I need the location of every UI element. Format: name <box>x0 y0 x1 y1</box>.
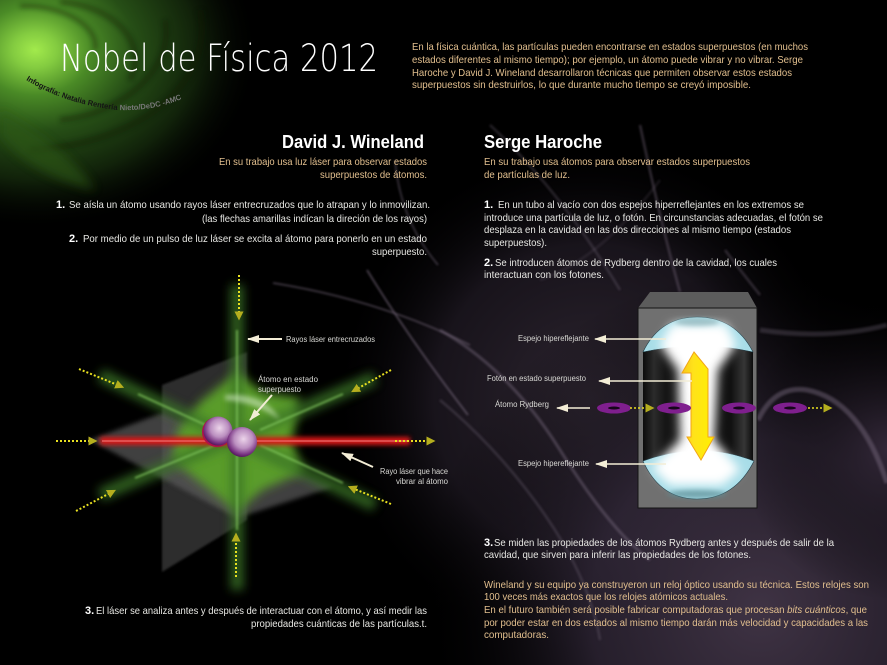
subheading: Wineland: En su trabajo usa luz láser para observar estados <box>219 156 427 168</box>
Haroche step 3: Se miden las propiedades de los átomos Rydberg antes y después de salir de la <box>494 537 834 549</box>
subheading: Haroche: de partículas de luz. <box>484 169 570 181</box>
white light column <box>652 324 740 485</box>
heading: Serge Haroche: Serge Haroche <box>484 132 602 152</box>
subheading: Haroche: En su trabajo usa átomos para observar estados superpuestos <box>484 156 750 168</box>
Wineland step 2: 2. <box>69 233 78 245</box>
Wineland step 1 <box>56 199 430 225</box>
label: atomo: Átomo en estado <box>258 375 319 384</box>
atoms <box>202 416 257 457</box>
Wineland step 3: El láser se analiza antes y después de interactuar con el átomo, y así medir las <box>96 605 427 617</box>
bottom mirror <box>643 450 754 499</box>
Haroche step 3: 3. <box>484 537 493 549</box>
intro text: Haroche y David J. Wineland desarrollaron técnicas que permiten observar estos estados <box>412 67 792 79</box>
label: atomo rydberg: Átomo Rydberg <box>495 400 549 409</box>
Rydberg atoms <box>597 402 807 414</box>
intro text: estados diferentes al mismo tiempo); por ejemplo, un átomo puede vibrar y no vibrar. Serge <box>412 54 803 66</box>
Wineland step 1: Se aísla un átomo usando rayos láser entrecruzados que lo atrapan y lo inmovilizan. <box>69 199 430 211</box>
title: Nobel de Física 2012 <box>60 37 378 80</box>
Wineland step 2: Por medio de un pulso de luz láser se excita al átomo para ponerlo en un estado <box>83 233 427 245</box>
subheading: Haroche <box>484 156 750 181</box>
Haroche step 3: cavidad, que sirven para inferir las propiedades de los fotones. <box>484 549 751 561</box>
Haroche step 2 <box>484 257 777 281</box>
label: rayo vibrar: Rayo láser que hace <box>380 467 448 476</box>
intro text: En la física cuántica, las partículas pueden encontrarse en estados superpuestos (en muchos <box>412 41 808 53</box>
Wineland step 3: 3. <box>85 605 94 617</box>
grey planes <box>90 352 333 572</box>
top mirror <box>643 317 753 352</box>
label: atomo <box>258 375 319 394</box>
label: atomo: superpuesto <box>258 385 302 394</box>
label: rayo vibrar: vibrar al átomo <box>396 477 449 486</box>
red laser beam <box>100 437 410 445</box>
atom diagram <box>56 275 449 590</box>
yellow dotted arrows <box>56 275 431 577</box>
label: espejo 2: Espejo hipereflejante <box>518 459 590 468</box>
Haroche step 1: En un tubo al vacío con dos espejos hiperreflejantes en los extremos se <box>498 199 804 211</box>
Wineland step 2: superpuesto. <box>372 246 427 258</box>
Haroche step 1 <box>484 199 823 249</box>
conclusion text: En el futuro también será posible fabricar computadoras que procesan bits cuánticos, que <box>484 604 867 616</box>
Haroche step 1: introduce una partícula de luz, o fotón. En circunstancias adecuadas, el fotón se <box>484 212 823 224</box>
mirror shading <box>667 318 727 498</box>
Haroche step 1: 1. <box>484 199 493 211</box>
Wineland step 3: propiedades cuánticas de las partículas.t. <box>251 618 427 630</box>
Haroche step 2: Se introducen átomos de Rydberg dentro de la cavidad, los cuales <box>495 257 777 269</box>
Haroche step 2: interactuan con los fotones. <box>484 269 604 281</box>
conclusion text: 100 veces más exactos que los relojes atómicos actuales. <box>484 591 728 603</box>
dotted arrows <box>630 407 828 409</box>
cavity diagram <box>487 292 828 508</box>
intro text <box>412 41 808 91</box>
photon double arrow <box>682 352 714 460</box>
subheading: Wineland: superpuestos de átomos. <box>320 169 427 181</box>
label: foton: Fotón en estado superpuesto <box>487 374 587 383</box>
credit: Infografía: Natalia Rentería Nieto/DeDC -AMC <box>26 76 182 110</box>
Haroche step 3 <box>484 537 834 561</box>
conclusion text: computadoras. <box>484 629 549 641</box>
conclusion text <box>484 579 869 641</box>
label: espejo 1: Espejo hipereflejante <box>518 334 590 343</box>
Wineland step 3 <box>85 605 427 630</box>
label: rayo vibrar <box>380 467 449 486</box>
pointer arrows <box>248 339 373 467</box>
green laser glow <box>100 285 375 590</box>
Wineland step 1: 1. <box>56 199 65 211</box>
label: rayos: Rayos láser entrecruzados <box>286 335 375 344</box>
Haroche step 2: 2. <box>484 257 493 269</box>
cylinder <box>643 346 753 461</box>
Wineland step 2 <box>69 233 427 258</box>
Wineland step 1: (las flechas amarillas indícan la direción de los rayos) <box>202 213 427 225</box>
heading: David J. Wineland: David J. Wineland <box>282 132 424 152</box>
intro text: superpuestos sin destruirlos, lo que durante mucho tiempo se creyó imposible. <box>412 79 751 91</box>
subheading: Wineland <box>219 156 427 181</box>
Haroche step 1: desplaza en la cavidad en las dos direcciones al mismo tiempo (estados <box>484 224 791 236</box>
cavity box <box>638 292 757 508</box>
Haroche step 1: superpuestos). <box>484 237 547 249</box>
pointer arrows <box>557 339 692 464</box>
green swirl <box>0 0 280 240</box>
